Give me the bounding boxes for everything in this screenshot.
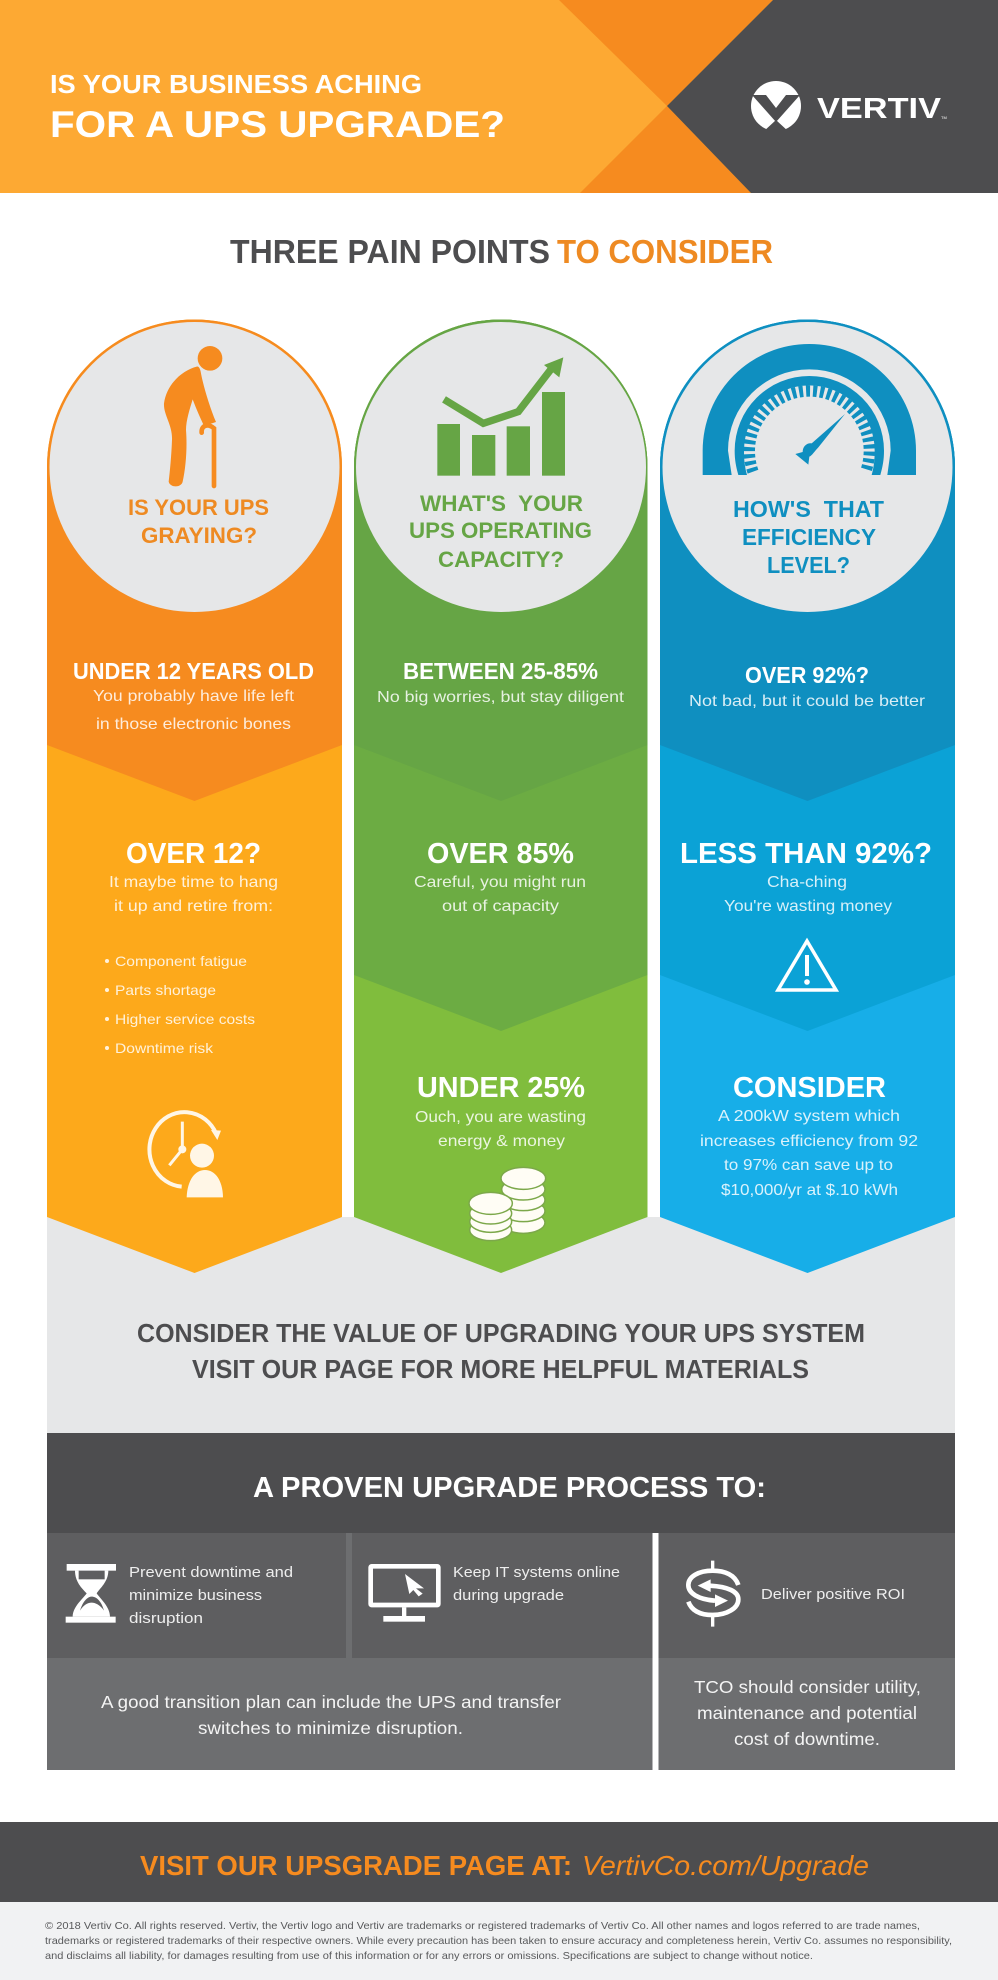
downtime text: disruption <box>129 1610 203 1627</box>
downtime text <box>129 1564 293 1627</box>
header title <box>50 69 505 145</box>
under 12 years text <box>73 658 314 733</box>
consider text: increases efficiency from 92 <box>700 1133 918 1150</box>
column question <box>733 496 884 578</box>
section heading <box>230 233 773 270</box>
consider text: A 200kW system which <box>718 1108 900 1125</box>
header banner <box>0 0 998 193</box>
over 85 text: OVER 85% <box>427 838 574 870</box>
consider text: VISIT OUR PAGE FOR MORE HELPFUL MATERIALS <box>192 1354 809 1384</box>
over 85 text: out of capacity <box>442 898 559 915</box>
icon: coin stacks <box>469 1167 546 1241</box>
under 25 text: UNDER 25% <box>417 1072 585 1104</box>
call to action band <box>0 1822 998 1902</box>
over 12 text: It maybe time to hang <box>109 874 278 891</box>
panel: capacity column <box>354 320 648 1273</box>
Vertiv logo: VERTIV <box>817 93 942 125</box>
tco text: maintenance and potential <box>697 1703 917 1723</box>
downtime text: minimize business <box>129 1587 262 1604</box>
over 92 text <box>689 662 926 710</box>
header title: IS YOUR BUSINESS ACHING <box>50 69 422 99</box>
icon: clock and person <box>149 1112 223 1197</box>
over 12 text: it up and retire from: <box>114 898 273 915</box>
column question: CAPACITY? <box>438 547 564 572</box>
gray consider panel <box>47 1217 955 1433</box>
panel: upgrade process <box>47 1433 955 1775</box>
risk bullet list: Higher service costs <box>115 1011 255 1027</box>
call to action band: VertivCo.com/Upgrade <box>582 1850 869 1881</box>
under 25 text <box>415 1072 586 1150</box>
over 12 text <box>109 838 278 915</box>
over 92 text: Not bad, but it could be better <box>689 693 926 710</box>
under 12 years text: in those electronic bones <box>96 716 291 733</box>
legal footer <box>0 1902 998 1980</box>
column question: GRAYING? <box>141 523 257 548</box>
header title: FOR A UPS UPGRADE? <box>50 104 505 145</box>
online text <box>453 1564 620 1604</box>
icon: elderly person with cane <box>164 346 222 486</box>
less than 92 text: Cha-ching <box>767 874 847 891</box>
column question <box>128 495 269 548</box>
legal footer: © 2018 Vertiv Co. All rights reserved. Vertiv, the Vertiv logo and Vertiv are trademarks or registered trademarks of Vertiv Co. All other names and logos referred to are trade names, <box>45 1920 920 1932</box>
call to action band: VISIT OUR UPSGRADE PAGE AT: <box>140 1850 572 1881</box>
less than 92 text <box>680 838 932 915</box>
transition plan text: A good transition plan can include the UPS and transfer <box>101 1692 561 1712</box>
tco text: cost of downtime. <box>734 1729 880 1749</box>
consider text <box>700 1072 918 1199</box>
consider text: CONSIDER THE VALUE OF UPGRADING YOUR UPS SYSTEM <box>137 1318 865 1348</box>
under 25 text: energy & money <box>438 1133 565 1150</box>
transition plan text <box>101 1692 561 1738</box>
tco text: TCO should consider utility, <box>694 1677 921 1697</box>
risk bullet list <box>105 953 255 1056</box>
less than 92 text: LESS THAN 92%? <box>680 838 932 870</box>
consider text: $10,000/yr at $.10 kWh <box>721 1182 898 1199</box>
column question: LEVEL? <box>767 552 850 578</box>
column question: UPS OPERATING <box>409 518 592 543</box>
legal footer: trademarks or registered trademarks of their respective owners. While every precaution has been taken to ensure accuracy and completeness herein, Vertiv Co. assumes no responsibility, <box>45 1935 952 1947</box>
downtime text: Prevent downtime and <box>129 1564 293 1581</box>
icon: dollar sign with arrows <box>688 1561 738 1627</box>
column question: EFFICIENCY <box>742 524 876 550</box>
legal footer: and disclaims all liability, for damages resulting from use of this information or for any errors or omissions. Specifications are subject to change without notice. <box>45 1950 813 1962</box>
icon: speedometer gauge <box>703 344 916 475</box>
over 85 text <box>414 838 586 915</box>
section heading: TO CONSIDER <box>557 233 773 270</box>
tco text <box>694 1677 921 1749</box>
panel: efficiency column <box>660 320 955 1273</box>
section heading: THREE PAIN POINTS <box>230 233 550 270</box>
under 12 years text: You probably have life left <box>93 688 295 705</box>
column question: IS YOUR UPS <box>128 495 269 520</box>
transition plan text: switches to minimize disruption. <box>198 1718 463 1738</box>
under 12 years text: UNDER 12 YEARS OLD <box>73 658 314 684</box>
Vertiv logo: TM <box>941 115 947 120</box>
icon: bar chart with rising arrow <box>437 357 565 476</box>
over 85 text: Careful, you might run <box>414 874 586 891</box>
consider text: to 97% can save up to <box>724 1157 893 1174</box>
roi text: Deliver positive ROI <box>761 1586 905 1603</box>
risk bullet list: Parts shortage <box>115 982 216 998</box>
risk bullet list: Component fatigue <box>115 953 247 969</box>
column question: HOW'S THAT <box>733 496 884 522</box>
icon: warning triangle <box>778 941 836 990</box>
icon: monitor with cursor <box>371 1566 438 1622</box>
icon: hourglass <box>66 1564 116 1623</box>
column question: WHAT'S YOUR <box>420 491 583 516</box>
between 25-85 text: No big worries, but stay diligent <box>377 689 625 706</box>
over 12 text: OVER 12? <box>126 838 261 870</box>
process heading: A PROVEN UPGRADE PROCESS TO: <box>253 1472 766 1504</box>
under 25 text: Ouch, you are wasting <box>415 1109 586 1126</box>
less than 92 text: You're wasting money <box>724 898 892 915</box>
column question <box>409 491 592 572</box>
consider text <box>137 1318 865 1384</box>
between 25-85 text: BETWEEN 25-85% <box>403 658 598 684</box>
over 92 text: OVER 92%? <box>745 662 869 688</box>
Vertiv logo <box>751 81 947 132</box>
online text: during upgrade <box>453 1587 564 1604</box>
consider text: CONSIDER <box>733 1072 886 1104</box>
online text: Keep IT systems online <box>453 1564 620 1581</box>
panel: age column <box>47 320 342 1273</box>
risk bullet list: Downtime risk <box>115 1040 214 1056</box>
between 25-85 text <box>377 658 625 706</box>
